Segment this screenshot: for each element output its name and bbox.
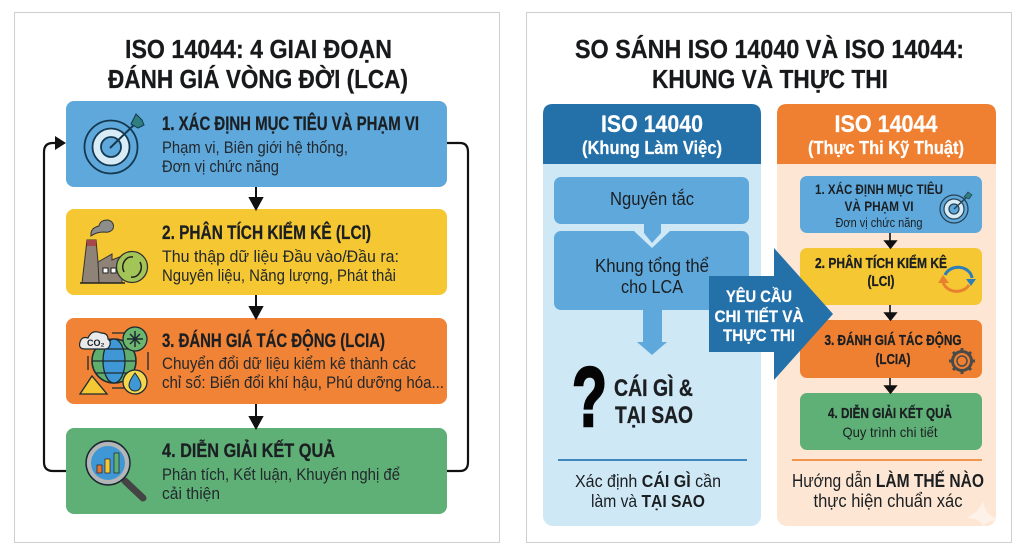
arrow: detailed requirements: YÊU CẦU (726, 287, 792, 306)
text: define what and why (575, 470, 721, 511)
step 2: (LCI) (868, 274, 895, 290)
panel: comparison (526, 12, 1012, 542)
step 2 (800, 248, 982, 305)
icon: gear (949, 348, 975, 374)
icon: magnifier with chart (86, 441, 143, 498)
text: how to implement (792, 470, 984, 511)
icon: globe and impacts: CO₂ (87, 338, 104, 348)
stage 2: inventory analysis: 2. PHÂN TÍCH KIỂM KÊ (LCI) (162, 222, 371, 244)
stage 3: impact assessment: 3. ĐÁNH GIÁ TÁC ĐỘNG (LCIA) (162, 330, 385, 352)
title: left panel: ISO 14044: 4 GIAI ĐOẠN (125, 36, 392, 64)
stage 1: goal and scope: 1. XÁC ĐỊNH MỤC TIÊU VÀ PHẠM VI (162, 113, 419, 135)
step 4: 4. DIỄN GIẢI KẾT QUẢ (828, 405, 952, 422)
stage 4: interpretation: 4. DIỄN GIẢI KẾT QUẢ (162, 440, 335, 462)
text: what and why (614, 374, 693, 429)
arrow: detailed requirements (709, 248, 833, 380)
stage 4: interpretation: cải thiện (162, 485, 220, 503)
stage 1: goal and scope (66, 101, 447, 187)
column header: ISO 14040: ISO 14040 (601, 111, 703, 138)
step 1: 1. XÁC ĐỊNH MỤC TIÊU (815, 180, 943, 197)
step 1 (800, 176, 982, 233)
title: left panel (108, 36, 408, 94)
arrow: stage 3 to 4 (250, 404, 262, 428)
column header: ISO 14040: (Khung Làm Việc) (582, 138, 722, 158)
arrow: detailed requirements: THỰC THI (723, 327, 795, 345)
text: how to implement: thực hiện chuẩn xác (814, 491, 962, 511)
arrow: framework down (637, 310, 667, 355)
stage 2: inventory analysis: Nguyên liệu, Năng lượng, Phát thải (162, 267, 396, 285)
icon: small target (940, 192, 972, 223)
step 3 (800, 320, 982, 378)
column header: ISO 14044: ISO 14044 (834, 111, 938, 138)
stage 3: impact assessment: chỉ số: Biến đổi khí hậu, Phú dưỡng hóa... (162, 374, 444, 392)
stage 4: interpretation (66, 428, 447, 514)
arrow: feedback loop right (447, 143, 468, 471)
step 1: Đơn vị chức năng (836, 215, 922, 230)
stage 1: goal and scope: Đơn vị chức năng (162, 158, 279, 176)
column header: ISO 14044 (777, 104, 996, 164)
stage 3: impact assessment (66, 318, 447, 404)
icon: factory with recycling (80, 220, 148, 283)
arrow: step 1 to 2 (885, 233, 896, 248)
title: left panel: ĐÁNH GIÁ VÒNG ĐỜI (LCA) (108, 64, 408, 94)
stage 2: inventory analysis (66, 209, 447, 295)
column header: ISO 14040 (543, 104, 761, 164)
column: ISO 14044 (777, 104, 996, 526)
step 3: 3. ĐÁNH GIÁ TÁC ĐỘNG (824, 331, 962, 349)
text: define what and why: Xác định CÁI GÌ cần (575, 470, 721, 491)
panel: ISO 14044 four stages (14, 12, 500, 542)
title: right panel: KHUNG VÀ THỰC THI (652, 65, 888, 94)
box: overall framework (554, 224, 749, 310)
icon: target (84, 114, 144, 174)
text: what and why: TẠI SAO (615, 402, 693, 429)
stage 2: inventory analysis: Thu thập dữ liệu Đầu vào/Đầu ra: (162, 248, 399, 266)
arrow: step 3 to 4 (885, 378, 896, 393)
arrow: stage 2 to 3 (250, 295, 262, 318)
icon: cycle arrows (938, 267, 976, 291)
stage 4: interpretation: Phân tích, Kết luận, Khuyến nghị để (162, 466, 400, 484)
box: principles: Nguyên tắc (610, 188, 694, 209)
step 4: Quy trình chi tiết (842, 424, 938, 440)
step 1: VÀ PHẠM VI (844, 198, 914, 214)
arrow: detailed requirements: CHI TIẾT VÀ (714, 307, 804, 326)
text: define what and why: làm và TẠI SAO (591, 491, 705, 511)
box: overall framework: cho LCA (621, 276, 684, 297)
column header: ISO 14044: (Thực Thi Kỹ Thuật) (808, 138, 964, 158)
arrow: step 2 to 3 (885, 305, 896, 320)
stage 3: impact assessment: Chuyển đổi dữ liệu kiểm kê thành các (162, 355, 416, 373)
step 2: 2. PHÂN TÍCH KIỂM KÊ (815, 254, 947, 272)
arrow: feedback loop left (44, 136, 66, 471)
step 4 (800, 393, 982, 450)
watermark sparkle (966, 500, 996, 526)
box: overall framework: Khung tổng thể (595, 255, 709, 276)
text: how to implement: Hướng dẫn LÀM THẾ NÀO (792, 470, 984, 491)
icon: question mark: ? (572, 350, 607, 444)
column: ISO 14040 (543, 104, 761, 526)
box: principles (554, 177, 749, 224)
title: right panel: SO SÁNH ISO 14040 VÀ ISO 14044: (575, 35, 964, 64)
arrow: stage 1 to 2 (250, 187, 262, 209)
icon: globe and impacts (80, 327, 148, 394)
stage 1: goal and scope: Phạm vi, Biên giới hệ thống, (162, 139, 348, 157)
text: what and why: CÁI GÌ & (614, 374, 693, 402)
step 3: (LCIA) (876, 352, 911, 368)
title: right panel (575, 35, 964, 94)
